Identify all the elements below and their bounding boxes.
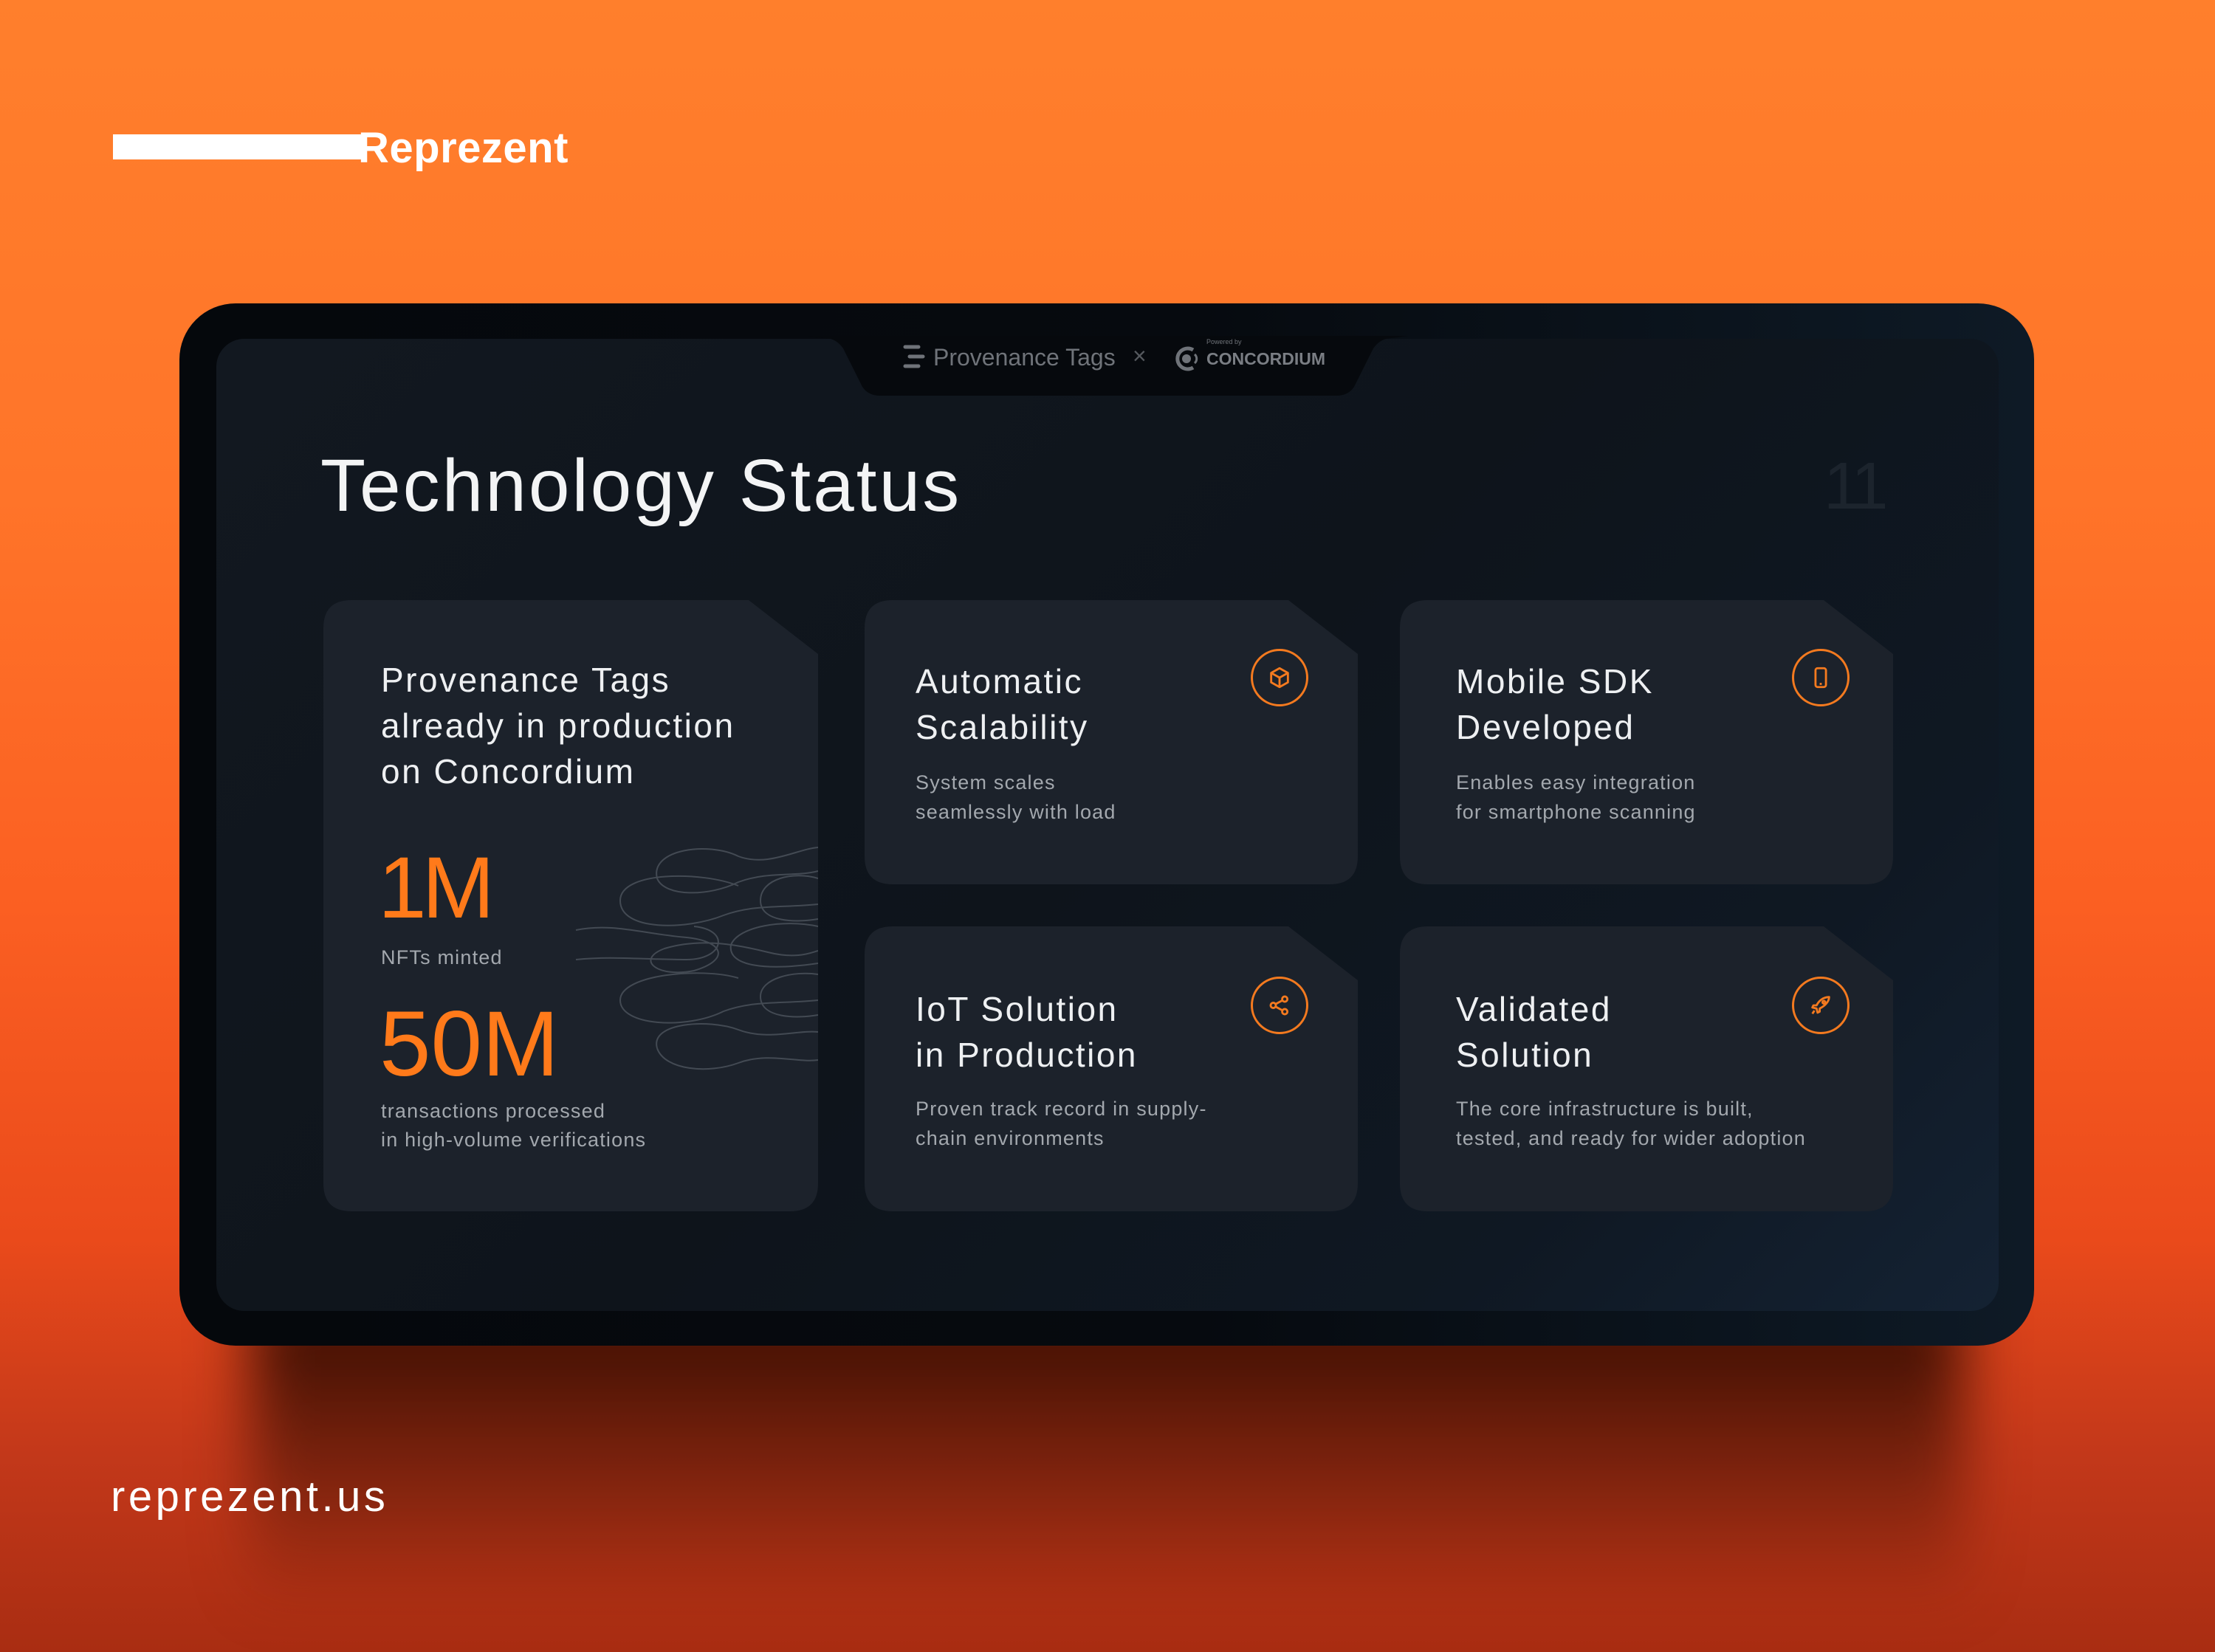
logo — [113, 124, 569, 172]
card2 text: System scales — [916, 771, 1056, 794]
card4 text: Proven track record in supply- — [916, 1098, 1207, 1120]
stat 50M: 50M — [380, 993, 559, 1095]
card4 text: in Production — [916, 1036, 1138, 1074]
icon: provenance tags — [904, 345, 924, 368]
card4 text: IoT Solution — [916, 990, 1119, 1028]
card 3 — [1400, 600, 1893, 884]
icon: concordium — [1175, 347, 1198, 371]
card2 text: Automatic — [916, 662, 1083, 701]
card2 text: seamlessly with load — [916, 801, 1116, 823]
card2 text — [916, 662, 1116, 823]
svg layer: tab, cards — [323, 337, 1893, 1211]
card4 text — [916, 990, 1207, 1149]
card5 text — [1456, 990, 1806, 1149]
card2 text: Scalability — [916, 708, 1089, 746]
card 1 — [323, 600, 818, 1211]
header tab — [808, 336, 1408, 396]
header tab logos: Powered by — [1206, 338, 1242, 345]
icon: phone — [1792, 649, 1850, 706]
device frame — [179, 303, 2034, 1346]
title: Technology Status — [320, 444, 961, 527]
wave decoration — [576, 847, 818, 1069]
card 4 — [865, 926, 1358, 1211]
card1 text: Provenance Tags — [381, 661, 670, 699]
card 5 — [1400, 926, 1893, 1211]
logo: Reprezent — [358, 124, 569, 172]
stat 1M: 1M — [378, 839, 490, 937]
card5 text: tested, and ready for wider adoption — [1456, 1127, 1806, 1149]
card3 text — [1456, 662, 1696, 823]
card3 text: Enables easy integration — [1456, 771, 1695, 794]
screen — [216, 339, 1999, 1311]
header tab logos: CONCORDIUM — [1206, 349, 1325, 368]
icon: share — [1251, 977, 1308, 1034]
card5 text: Validated — [1456, 990, 1612, 1028]
card 2 — [865, 600, 1358, 884]
icon: rocket — [1792, 977, 1850, 1034]
icon: cube — [1251, 649, 1308, 706]
header tab logos: Provenance Tags — [933, 344, 1116, 371]
card1 text: in high-volume verifications — [381, 1129, 646, 1151]
footer url: reprezent.us — [111, 1473, 388, 1521]
card5 text: Solution — [1456, 1036, 1593, 1074]
card3 text: Developed — [1456, 708, 1635, 746]
card4 text: chain environments — [916, 1127, 1105, 1149]
header tab logos: × — [1133, 343, 1147, 369]
card1 text: NFTs minted — [381, 946, 503, 968]
card3 text: Mobile SDK — [1456, 662, 1654, 701]
card1 text: already in production — [381, 706, 735, 745]
card1 text: on Concordium — [381, 752, 635, 791]
device shadow — [251, 1299, 1964, 1609]
card3 text: for smartphone scanning — [1456, 801, 1696, 823]
header tab logos — [904, 338, 1325, 371]
card5 text: The core infrastructure is built, — [1456, 1098, 1754, 1120]
page number: 11 — [1824, 450, 1883, 523]
card1 text: transactions processed — [381, 1100, 605, 1122]
card1 text — [378, 661, 735, 1151]
